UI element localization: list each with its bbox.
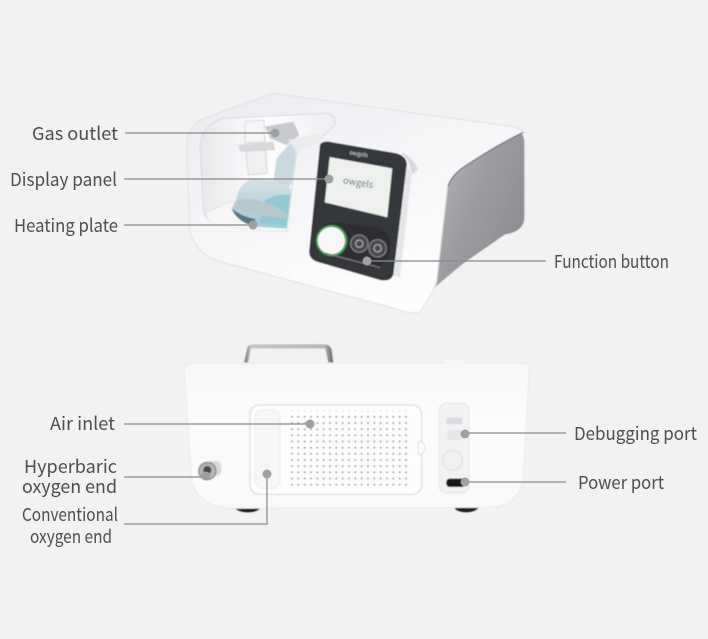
label: gas outlet: Gas outlet [32, 120, 118, 146]
device right side panel [433, 133, 524, 288]
top cap [445, 360, 464, 364]
label: conventional oxygen end: Conventional [22, 501, 118, 527]
foot right [454, 508, 479, 512]
screen logo: owgels [342, 172, 375, 191]
hyperbaric connector [199, 461, 221, 480]
power button [351, 235, 368, 252]
label: hyperbaric oxygen end [22, 453, 117, 499]
device: front view [187, 94, 524, 313]
label: hyperbaric oxygen end: Hyperbaric [24, 453, 117, 479]
screen [325, 157, 392, 217]
port panel [439, 403, 469, 493]
device body shell [187, 94, 523, 313]
label: heating plate: Heating plate [14, 212, 118, 238]
chamber tube [245, 120, 265, 143]
chamber jar [232, 178, 292, 228]
label: display panel: Display panel [10, 166, 117, 192]
label: hyperbaric oxygen end: oxygen end [22, 473, 117, 499]
knob [316, 225, 347, 256]
foot left [234, 508, 261, 512]
control panel [309, 142, 418, 281]
side panel top edge [448, 132, 523, 187]
rear shell [184, 363, 529, 508]
label: conventional oxygen end: oxygen end [30, 523, 112, 549]
device: rear view [184, 344, 529, 512]
air inlet cover [250, 405, 425, 494]
panel logo: owgels [349, 147, 369, 159]
marker dots [202, 128, 470, 486]
label: air inlet: Air inlet [50, 410, 115, 436]
button surround [319, 222, 391, 268]
label: debugging port: Debugging port [574, 420, 697, 446]
label: function button: Function button [554, 248, 669, 274]
chamber recess [200, 113, 335, 228]
mode button [369, 240, 386, 257]
handle [244, 344, 333, 363]
label: conventional oxygen end [22, 501, 118, 549]
vent holes [288, 411, 410, 487]
heating shelf [205, 202, 290, 232]
label: power port: Power port [578, 469, 664, 495]
power socket [446, 479, 465, 487]
water chamber [232, 120, 322, 228]
leader lines [124, 133, 566, 524]
